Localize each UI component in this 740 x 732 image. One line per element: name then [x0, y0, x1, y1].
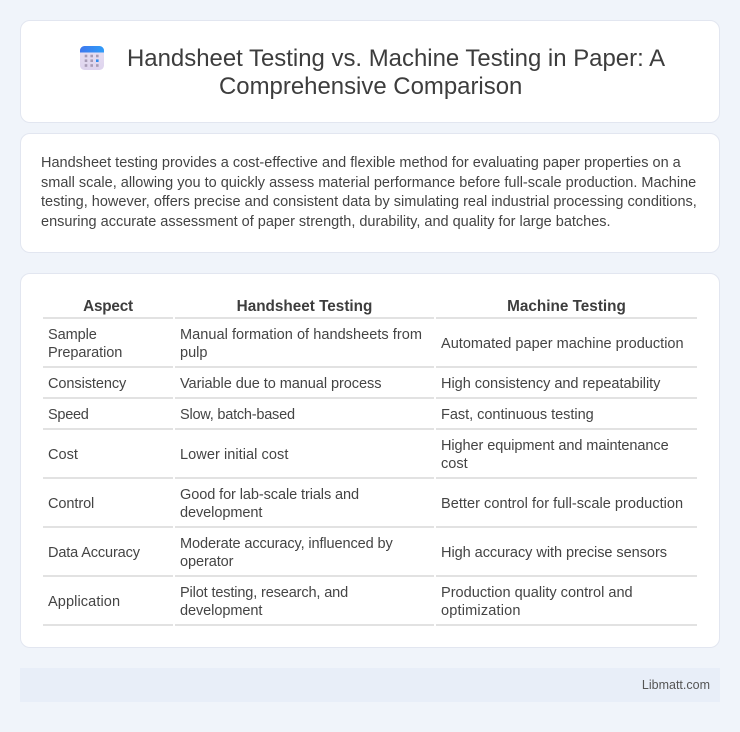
row: application	[48, 585, 633, 619]
intro text: testing, however, offers precise and consistent data by simulating real industrial processing conditions,	[41, 194, 697, 210]
row: control: Better control for full-scale production	[441, 496, 683, 512]
row: consistency	[48, 376, 660, 392]
row: cost: Cost	[48, 447, 78, 463]
table header: machine testing: Machine Testing	[507, 298, 626, 315]
row: data accuracy: Moderate accuracy, influenced by	[180, 536, 393, 552]
row: consistency: High consistency and repeatability	[441, 376, 660, 392]
intro text: small scale, allowing you to quickly assess material performance before full-scale production. Machine	[41, 175, 696, 191]
icon: calendar	[80, 46, 104, 70]
row: data accuracy: operator	[180, 554, 233, 570]
row: data accuracy	[48, 536, 667, 570]
row: sample preparation: Manual formation of handsheets from	[180, 327, 422, 343]
panel: comparison table	[20, 273, 720, 648]
table header: handsheet testing: Handsheet Testing	[237, 298, 372, 315]
row: control	[48, 487, 683, 521]
row: consistency: Consistency	[48, 376, 126, 392]
row: sample preparation: Automated paper machine production	[441, 336, 684, 352]
row: speed	[48, 407, 594, 423]
text: Handsheet Testing vs. Machine Testing in Paper: A	[127, 45, 665, 72]
row: application: development	[180, 603, 262, 619]
text: Comprehensive Comparison	[219, 73, 522, 100]
row: sample preparation	[48, 327, 684, 361]
row: application: Application	[48, 594, 120, 610]
table header: aspect: Aspect	[83, 298, 133, 315]
row: speed: Slow, batch-based	[180, 407, 295, 423]
row: speed: Fast, continuous testing	[441, 407, 594, 423]
row: sample preparation: Preparation	[48, 345, 122, 361]
row: control: development	[180, 505, 262, 521]
title	[127, 45, 665, 100]
row: cost: Higher equipment and maintenance	[441, 438, 669, 454]
row: control: Good for lab-scale trials and	[180, 487, 359, 503]
intro text: ensuring accurate assessment of paper strength, durability, and quality for large batches.	[41, 214, 611, 230]
row: application: optimization	[441, 603, 521, 619]
row: application: Production quality control and	[441, 585, 633, 601]
row: sample preparation: pulp	[180, 345, 208, 361]
intro text: Handsheet testing provides a cost-effective and flexible method for evaluating paper properties on a	[41, 155, 681, 171]
row: cost: cost	[441, 456, 468, 472]
row: data accuracy: High accuracy with precise sensors	[441, 545, 667, 561]
row: cost	[48, 438, 669, 472]
footer text: Libmatt.com: Libmatt.com	[642, 678, 710, 692]
panel: intro card	[20, 133, 720, 253]
row: sample preparation: Sample	[48, 327, 97, 343]
row: speed: Speed	[48, 407, 89, 423]
footer bar	[20, 668, 720, 702]
row: control: Control	[48, 496, 94, 512]
intro text	[41, 155, 697, 230]
row: data accuracy: Data Accuracy	[48, 545, 140, 561]
row: consistency: Variable due to manual process	[180, 376, 381, 392]
row: cost: Lower initial cost	[180, 447, 288, 463]
row: application: Pilot testing, research, and	[180, 585, 348, 601]
panel: title card	[20, 20, 720, 123]
